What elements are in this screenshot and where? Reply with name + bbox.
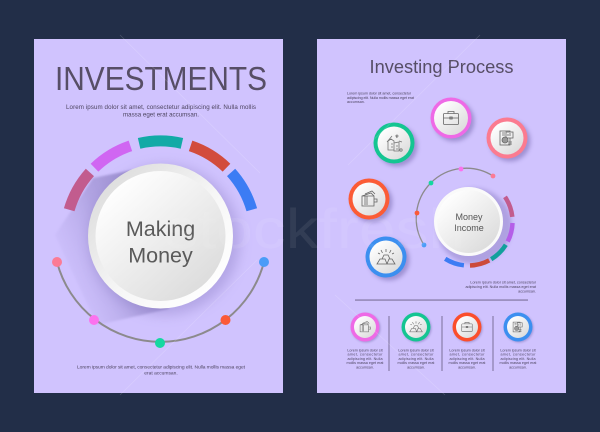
caption: amet, consectetur xyxy=(450,353,485,357)
caption: adipiscing elit. Nulla xyxy=(450,357,485,361)
caption xyxy=(500,348,536,370)
caption: accumsan. xyxy=(509,366,527,370)
label: making money: Making xyxy=(126,217,195,241)
caption: mollis massa eget erat xyxy=(347,361,383,365)
icon: gold bars node xyxy=(366,236,410,280)
side note text: accumsan. xyxy=(518,290,536,294)
dotted arc around money income xyxy=(415,167,495,247)
segmented top arc xyxy=(69,141,252,210)
segmented arc around money income xyxy=(445,197,512,266)
intro text: massa eget erat accumsan. xyxy=(123,112,199,118)
caption: adipiscing elit. Nulla xyxy=(500,357,536,361)
title: investments: INVESTMENTS xyxy=(55,60,267,97)
footer text: Lorem ipsum dolor sit amet, consectetur adipiscing elit. Nulla mollis massa eget xyxy=(77,364,246,370)
caption: Lorem ipsum dolor sit xyxy=(398,348,434,352)
side note text: adipiscing elit. Nulla mollis massa eget erat xyxy=(465,285,536,289)
column: wallet xyxy=(347,312,383,370)
icon: money stack node xyxy=(374,122,418,166)
caption: amet, consectetur xyxy=(398,353,434,357)
caption: mollis massa eget erat xyxy=(398,361,434,365)
label: making money xyxy=(126,217,195,268)
caption: amet, consectetur xyxy=(500,353,536,357)
footer text: erat accumsan. xyxy=(144,370,178,376)
side note text: Lorem ipsum dolor sit amet, consectetur xyxy=(470,280,537,284)
icon: document chart node xyxy=(486,118,530,162)
label: money income: Money xyxy=(455,212,483,222)
column: document chart xyxy=(500,312,536,370)
caption: Lorem ipsum dolor sit xyxy=(500,348,536,352)
intro text: Lorem ipsum dolor sit amet, consectetur xyxy=(347,92,412,96)
caption: accumsan. xyxy=(356,366,374,370)
caption: adipiscing elit. Nulla xyxy=(348,357,383,361)
intro text xyxy=(66,104,256,118)
caption: adipiscing elit. Nulla xyxy=(398,357,434,361)
title: investing process: Investing Process xyxy=(370,56,514,77)
bottom dotted timeline arc xyxy=(52,257,269,348)
icon: briefcase node xyxy=(430,98,474,142)
caption xyxy=(449,348,485,370)
footer text xyxy=(77,364,246,376)
intro text xyxy=(347,92,414,104)
long shadow of central circle xyxy=(55,170,200,325)
soft glow behind money income xyxy=(436,188,512,264)
intro text: adipiscing elit. Nulla mollis massa eget erat xyxy=(347,96,414,100)
panel: investments xyxy=(34,39,283,393)
intro text: accumsan. xyxy=(347,100,365,104)
caption: mollis massa eget erat xyxy=(500,361,536,365)
label: money income xyxy=(454,212,484,233)
central circle: money income xyxy=(434,187,503,256)
column: gold bars xyxy=(398,312,434,370)
column: briefcase xyxy=(449,312,485,370)
central circle: making money xyxy=(88,164,233,308)
soft glow behind central circle xyxy=(90,165,240,315)
caption: mollis massa eget erat xyxy=(449,361,485,365)
caption xyxy=(347,348,383,370)
side note text xyxy=(465,280,537,294)
label: money income: Income xyxy=(454,223,484,233)
caption: amet, consectetur xyxy=(348,353,383,357)
caption: accumsan. xyxy=(407,366,425,370)
caption xyxy=(398,348,434,370)
column separators xyxy=(388,316,494,371)
caption: Lorem ipsum dolor sit xyxy=(449,348,485,352)
label: making money: Money xyxy=(128,244,193,268)
watermark: stockfresh xyxy=(165,197,465,260)
caption: accumsan. xyxy=(458,366,476,370)
caption: Lorem ipsum dolor sit xyxy=(347,348,383,352)
intro text: Lorem ipsum dolor sit amet, consectetur adipiscing elit. Nulla mollis xyxy=(66,104,256,111)
icon: wallet node xyxy=(348,178,392,222)
horizontal divider xyxy=(355,300,528,301)
panel: investing process xyxy=(317,39,566,393)
